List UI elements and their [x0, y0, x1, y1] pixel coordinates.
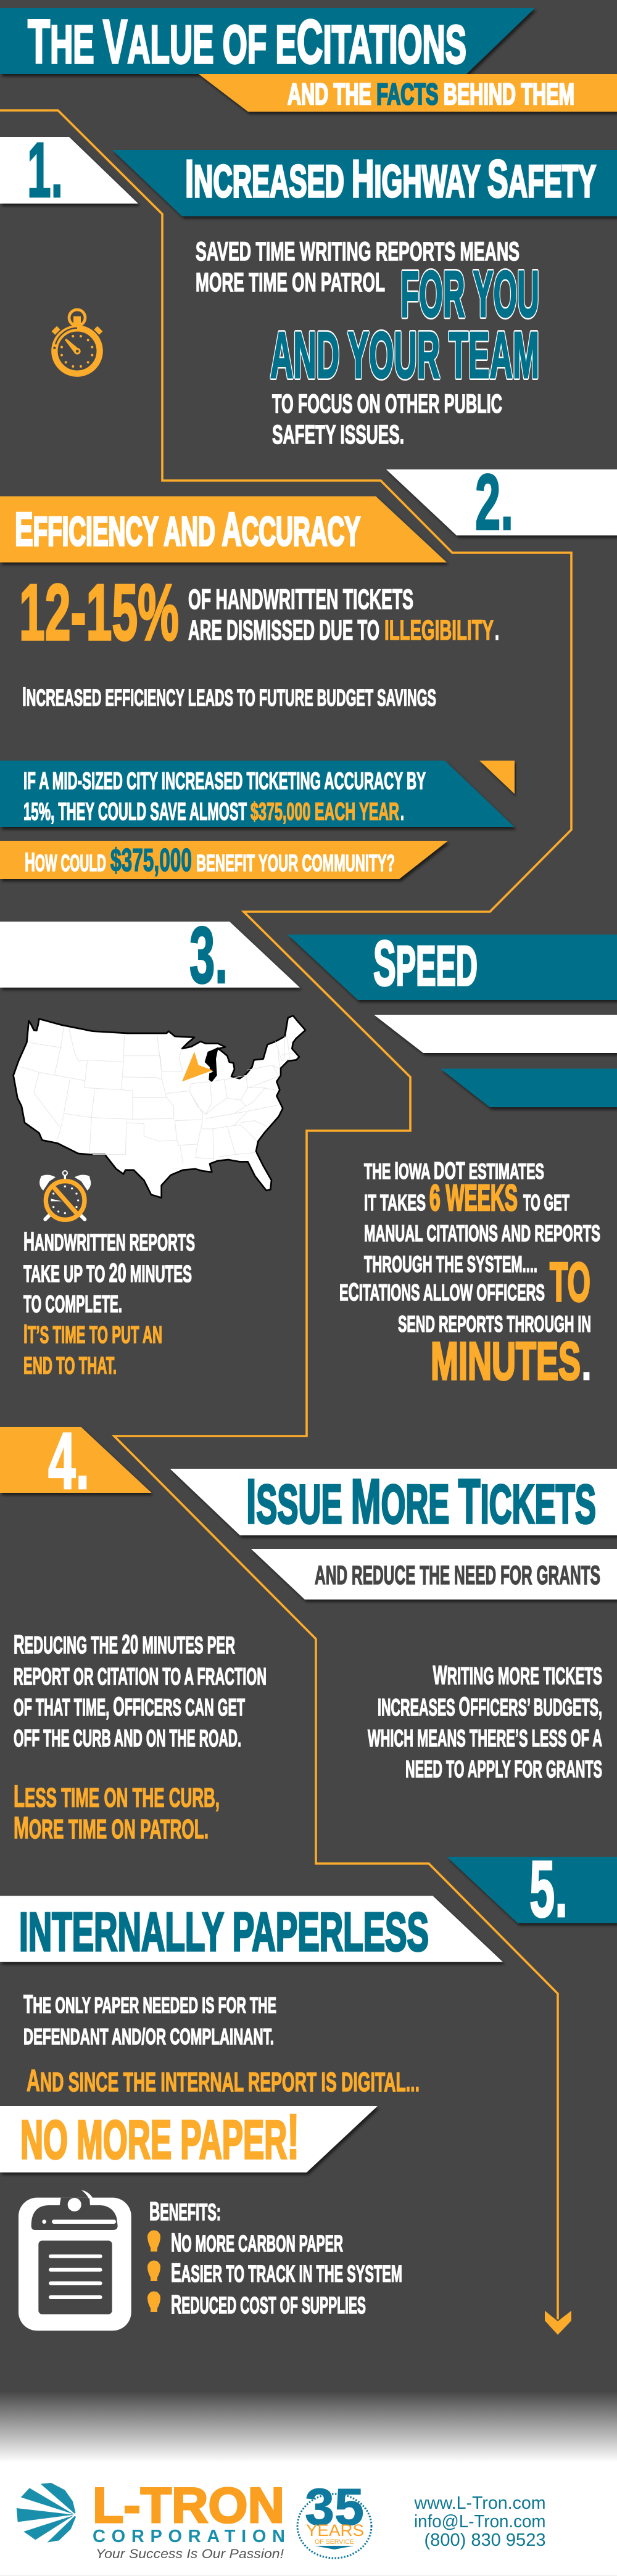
- statistic: 12-15%: ILLEGIBILITY: [384, 614, 494, 646]
- callout: savings: .: [400, 798, 404, 825]
- left text: handwritten reports: IT’S TIME TO PUT AN: [23, 1319, 162, 1349]
- logo: company name: CORPORATION: [93, 2527, 285, 2546]
- white accent stripe: [374, 1015, 617, 1053]
- left text: reducing minutes: OF THAT TIME, OFFICERS CAN GET: [14, 1692, 245, 1722]
- right text: Iowa DOT estimate: [339, 1158, 600, 1391]
- section 2 heading: EFFICIENCY AND ACCURACY: [15, 503, 360, 556]
- contact details: www.L-Tron.com: [414, 2493, 545, 2513]
- section 1 body text: MORE TIME ON PATROL: [196, 268, 385, 297]
- right text: Iowa DOT estimate: .: [582, 1340, 591, 1389]
- bullet: bulb 1: [147, 2231, 160, 2252]
- statistic: 12-15%: .: [495, 614, 499, 646]
- teal accent stripe: [441, 1068, 617, 1107]
- section 3 number tab: [0, 910, 300, 1000]
- connector line with arrow: [0, 110, 571, 2335]
- paperless body text: THE ONLY PAPER NEEDED IS FOR THE: [23, 1989, 276, 2018]
- section 4 number tab: [0, 1416, 152, 1506]
- benefits list: [147, 2197, 402, 2319]
- left text: reducing minutes: REPORT OR CITATION TO A FRACTION: [14, 1664, 267, 1690]
- callout: savings: [0, 761, 515, 827]
- paperless body text: [23, 1989, 420, 2098]
- badge: 35 years of service: [297, 2478, 371, 2558]
- right text: Iowa DOT estimate: TO GET: [523, 1190, 569, 1215]
- badge: 35 years of service: OF SERVICE: [315, 2538, 354, 2546]
- bullet: bulb 3: [147, 2291, 160, 2312]
- right text: Iowa DOT estimate: 6 WEEKS: [429, 1178, 518, 1218]
- statistic: 12-15%: ARE DISMISSED DUE TO: [188, 614, 379, 646]
- left text: handwritten reports: HANDWRITTEN REPORTS: [23, 1227, 195, 1257]
- logo: company name: [93, 2478, 285, 2561]
- left text: reducing minutes: MORE TIME ON PATROL.: [14, 1810, 209, 1845]
- left text: reducing minutes: REDUCING THE 20 MINUTES PER: [14, 1630, 235, 1659]
- left text: handwritten reports: [23, 1227, 195, 1379]
- logo: company name: L-TRON: [93, 2478, 284, 2533]
- benefits list: NO MORE CARBON PAPER: [171, 2228, 343, 2258]
- subtitle banner: [199, 74, 617, 112]
- left text: handwritten reports: TAKE UP TO 20 MINUTES: [23, 1258, 192, 1288]
- statistic: 12-15%: 12-15%: [19, 568, 179, 657]
- section 4 number tab: 4.: [48, 1416, 89, 1506]
- banner: no more paper: NO MORE PAPER!: [20, 2102, 299, 2172]
- callout: savings: 15%, THEY COULD SAVE ALMOST: [23, 798, 247, 825]
- section 2 number tab: 2.: [475, 458, 513, 547]
- icon: stopwatch: [52, 310, 102, 374]
- statistic: 12-15%: OF HANDWRITTEN TICKETS: [188, 584, 413, 615]
- contact details: [414, 2493, 545, 2550]
- right text: writing more tickets: [368, 1661, 602, 1783]
- icon: clipboard: [19, 2190, 131, 2330]
- callout: community question: BENEFIT YOUR COMMUNITY?: [196, 851, 395, 877]
- section 3 number tab: 3.: [189, 910, 228, 1000]
- section 1 body text: [196, 237, 539, 450]
- left text: reducing minutes: [14, 1630, 267, 1845]
- paperless body text: DEFENDANT AND/OR COMPLAINANT.: [23, 2024, 274, 2049]
- section 5 number tab: 5.: [529, 1844, 568, 1934]
- section 2 number tab: [386, 458, 617, 547]
- benefits list: EASIER TO TRACK IN THE SYSTEM: [171, 2258, 402, 2288]
- section 1 number tab: 1.: [27, 126, 63, 213]
- badge: 35 years of service: 35: [305, 2478, 364, 2536]
- callout: community question: HOW COULD: [25, 848, 106, 877]
- section 1 body text: SAFETY ISSUES.: [272, 420, 404, 450]
- section 3 heading: [288, 928, 617, 1000]
- callout: savings: $375,000 EACH YEAR: [251, 798, 399, 825]
- contact details: info@L-Tron.com: [414, 2512, 545, 2532]
- left text: reducing minutes: LESS TIME ON THE CURB,: [14, 1779, 220, 1814]
- callout: community question: $375,000: [110, 843, 192, 878]
- section 3 heading: SPEED: [373, 928, 478, 999]
- benefits list: REDUCED COST OF SUPPLIES: [171, 2290, 366, 2319]
- statistic: 12-15%: [19, 568, 499, 657]
- left text: handwritten reports: END TO THAT.: [23, 1353, 117, 1379]
- section 1 number tab: [0, 126, 138, 213]
- callout: community question: [0, 841, 448, 879]
- right text: Iowa DOT estimate: THE IOWA DOT ESTIMATES: [364, 1158, 544, 1184]
- benefits list: BENEFITS:: [149, 2197, 221, 2226]
- section 4 subheading: [251, 1549, 617, 1600]
- left text: handwritten reports: TO COMPLETE.: [23, 1291, 122, 1318]
- logo: L-Tron sunburst: [17, 2483, 76, 2543]
- map: United States with Iowa pointer: [14, 1016, 305, 1198]
- left text: reducing minutes: OFF THE CURB AND ON THE ROAD.: [14, 1725, 241, 1752]
- right text: Iowa DOT estimate: IT TAKES: [364, 1190, 426, 1215]
- icon: crossed-out alarm clock: [39, 1171, 91, 1220]
- logo: company name: Your Success Is Our Passion!: [96, 2547, 284, 2561]
- contact details: (800) 830 9523: [424, 2530, 545, 2550]
- section 5 number tab: [447, 1844, 617, 1934]
- title banner: THE VALUE OF ECITATIONS: [28, 7, 466, 76]
- bullet: bulb 2: [147, 2260, 160, 2281]
- badge: 35 years of service: YEARS: [306, 2521, 364, 2540]
